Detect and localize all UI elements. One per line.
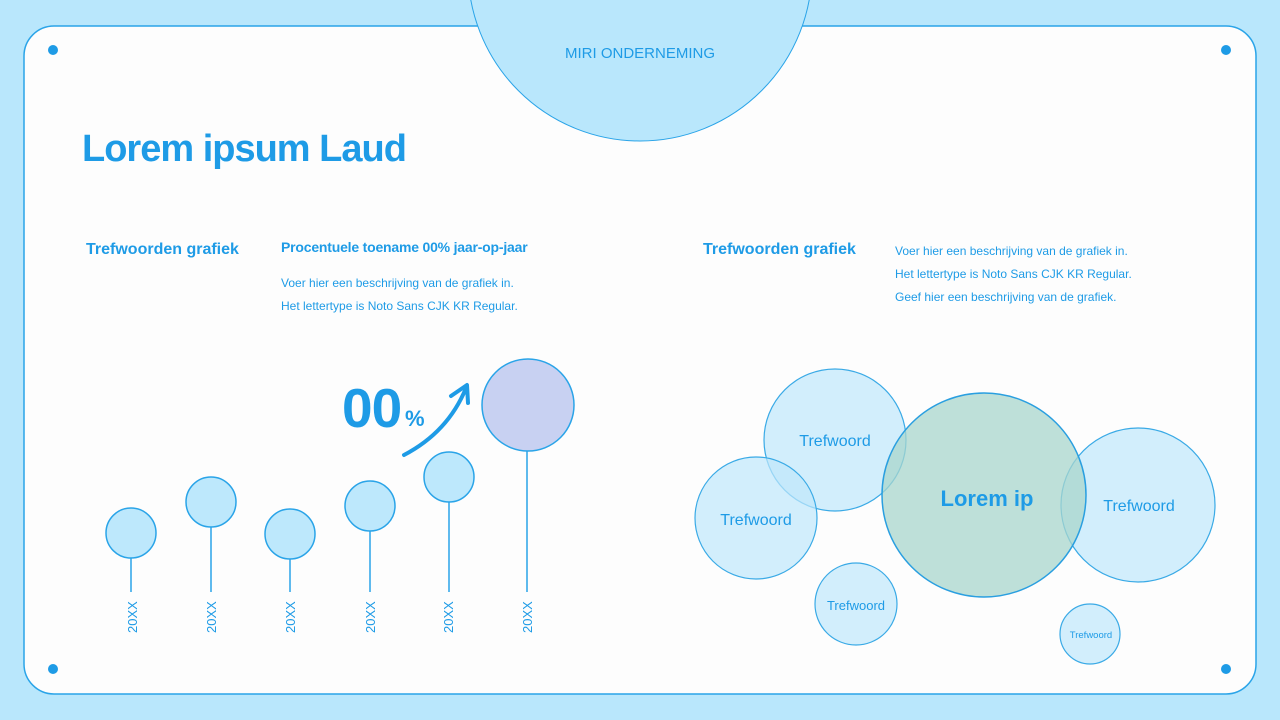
left description (281, 239, 528, 313)
lollipop chart: 20XX (520, 601, 535, 633)
right description: Geef hier een beschrijving van de grafiek. (895, 290, 1116, 304)
left description: Het lettertype is Noto Sans CJK KR Regular. (281, 299, 518, 313)
right description (895, 244, 1132, 304)
header circle (468, 0, 812, 141)
bubble chart: Trefwoord (827, 598, 885, 613)
lollipop chart (106, 359, 574, 633)
lollipop chart: 20XX (204, 601, 219, 633)
lollipop chart: 20XX (363, 601, 378, 633)
right heading: Trefwoorden grafiek (703, 241, 856, 258)
bubble chart: Lorem ip (941, 486, 1033, 511)
percentage callout: 00 (342, 377, 401, 439)
bubble chart: Trefwoord (799, 433, 871, 450)
right description: Het lettertype is Noto Sans CJK KR Regular. (895, 267, 1132, 281)
right description: Voer hier een beschrijving van de grafiek in. (895, 244, 1128, 258)
lollipop chart: 20XX (441, 601, 456, 633)
left heading: Trefwoorden grafiek (86, 241, 239, 258)
lollipop chart: 20XX (283, 601, 298, 633)
left description: Procentuele toename 00% jaar-op-jaar (281, 239, 528, 255)
bubble chart: Trefwoord (720, 512, 792, 529)
bubble chart: Trefwoord (1103, 498, 1175, 515)
percentage callout: % (405, 406, 425, 431)
header circle: MIRI ONDERNEMING (565, 45, 715, 62)
bubble chart: Trefwoord (1070, 630, 1112, 641)
lollipop chart: 20XX (125, 601, 140, 633)
title: Lorem ipsum Laud (82, 128, 406, 170)
left description: Voer hier een beschrijving van de grafiek in. (281, 276, 514, 290)
bubble chart (695, 369, 1215, 664)
arrow (404, 385, 468, 455)
